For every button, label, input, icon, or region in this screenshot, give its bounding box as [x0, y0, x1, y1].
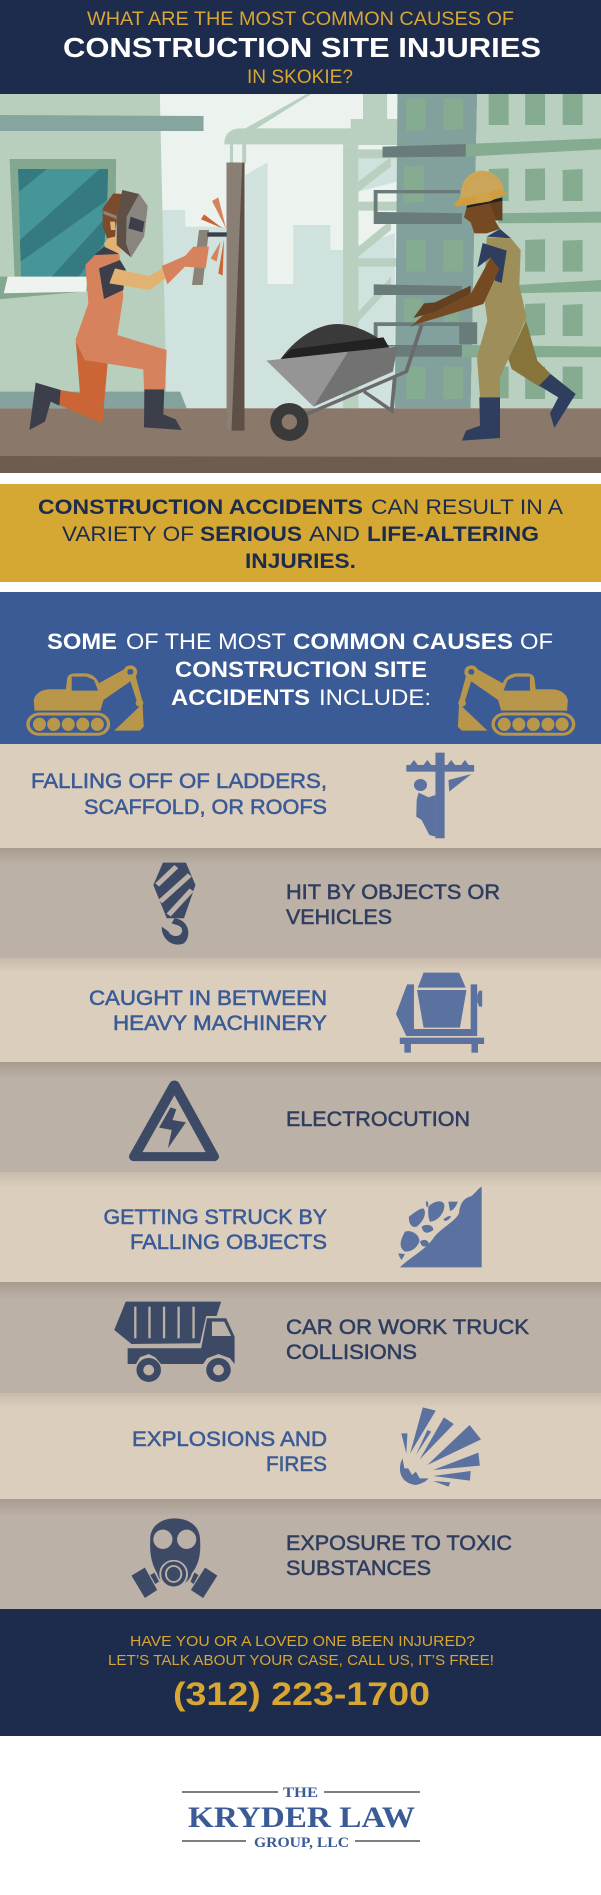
row: falling off ladders: [0, 744, 601, 848]
row: falling off ladders: FALLING OFF OF LADDERS,: [31, 770, 327, 793]
blue heading panel: OF THE MOST: [126, 629, 286, 654]
row: toxic substances: EXPOSURE TO TOXIC: [286, 1532, 512, 1555]
row: caught in machinery: CAUGHT IN BETWEEN: [89, 987, 327, 1010]
call to action band: HAVE YOU OR A LOVED ONE BEEN INJURED?: [130, 1633, 475, 1650]
row: struck by falling objects: GETTING STRUCK BY: [104, 1206, 327, 1229]
title line 3: IN SKOKIE?: [247, 66, 353, 88]
row: hit by objects: [0, 848, 601, 958]
row: toxic substances: [0, 1499, 601, 1609]
blue heading panel: COMMON CAUSES: [293, 629, 513, 654]
blue heading panel: ACCIDENTS: [171, 685, 310, 710]
pillar: [227, 163, 245, 431]
row: hit by objects: VEHICLES: [286, 906, 392, 929]
gold banner: AND: [309, 523, 360, 546]
blue heading panel: INCLUDE:: [319, 685, 431, 710]
row: truck collisions: [0, 1282, 601, 1393]
title line 2: CONSTRUCTION SITE INJURIES: [63, 32, 541, 63]
gold banner: SERIOUS: [200, 523, 302, 546]
row: falling off ladders: SCAFFOLD, OR ROOFS: [84, 796, 327, 819]
row: electrocution: ELECTROCUTION: [286, 1108, 470, 1131]
blue heading panel: OF: [520, 629, 553, 654]
icon: worker climbing utility pole: [406, 753, 474, 838]
welder: [29, 190, 227, 430]
gold banner: LIFE-ALTERING: [367, 523, 539, 546]
logo: The Kryder Law Group: KRYDER LAW: [188, 1801, 415, 1834]
icon: high voltage warning triangle: [134, 1085, 214, 1157]
phone number: (312) 223-1700: [173, 1676, 430, 1712]
gold banner: [0, 484, 601, 582]
call to action band: LET’S TALK ABOUT YOUR CASE, CALL US, IT’S FREE!: [108, 1652, 494, 1669]
blue heading panel: SOME: [47, 629, 117, 654]
icon: dump truck: [114, 1302, 235, 1382]
icon: excavator right: [458, 665, 574, 734]
row: caught in machinery: [0, 958, 601, 1062]
gold banner: INJURIES.: [245, 550, 356, 573]
blue heading panel: CONSTRUCTION SITE: [175, 657, 427, 682]
icon: explosion: [400, 1407, 481, 1487]
call to action band: [0, 1609, 601, 1736]
row: hit by objects: HIT BY OBJECTS OR: [286, 881, 500, 904]
worker: [410, 171, 576, 441]
row: struck by falling objects: FALLING OBJECTS: [130, 1231, 327, 1254]
logo: The Kryder Law Group: THE: [283, 1785, 318, 1801]
wheelbarrow: [266, 324, 422, 441]
icon: excavator left: [28, 665, 144, 734]
row: explosions and fires: FIRES: [266, 1453, 327, 1476]
logo: The Kryder Law Group: [182, 1785, 420, 1851]
header: title band: [0, 0, 601, 94]
illustration: construction site with welder and worker: [0, 94, 601, 475]
icon: cement mixer: [396, 973, 484, 1053]
row: explosions and fires: EXPLOSIONS AND: [132, 1428, 327, 1451]
row: toxic substances: SUBSTANCES: [286, 1557, 431, 1580]
gold banner: CONSTRUCTION ACCIDENTS: [38, 496, 363, 519]
row: struck by falling objects: [0, 1172, 601, 1282]
title line 1: WHAT ARE THE MOST COMMON CAUSES OF: [87, 8, 514, 30]
gold banner: CAN RESULT IN A: [371, 496, 563, 519]
gold banner: VARIETY OF: [62, 523, 194, 546]
row: truck collisions: COLLISIONS: [286, 1341, 417, 1364]
row: truck collisions: CAR OR WORK TRUCK: [286, 1316, 529, 1339]
logo: The Kryder Law Group: GROUP, LLC: [254, 1835, 349, 1851]
blue heading panel: [0, 592, 601, 744]
row: caught in machinery: HEAVY MACHINERY: [113, 1012, 327, 1035]
icon: rockslide: [398, 1187, 482, 1267]
row: explosions and fires: [0, 1393, 601, 1499]
icon: gas mask: [131, 1518, 217, 1598]
row: electrocution: [0, 1062, 601, 1172]
icon: crane hook: [153, 863, 195, 945]
